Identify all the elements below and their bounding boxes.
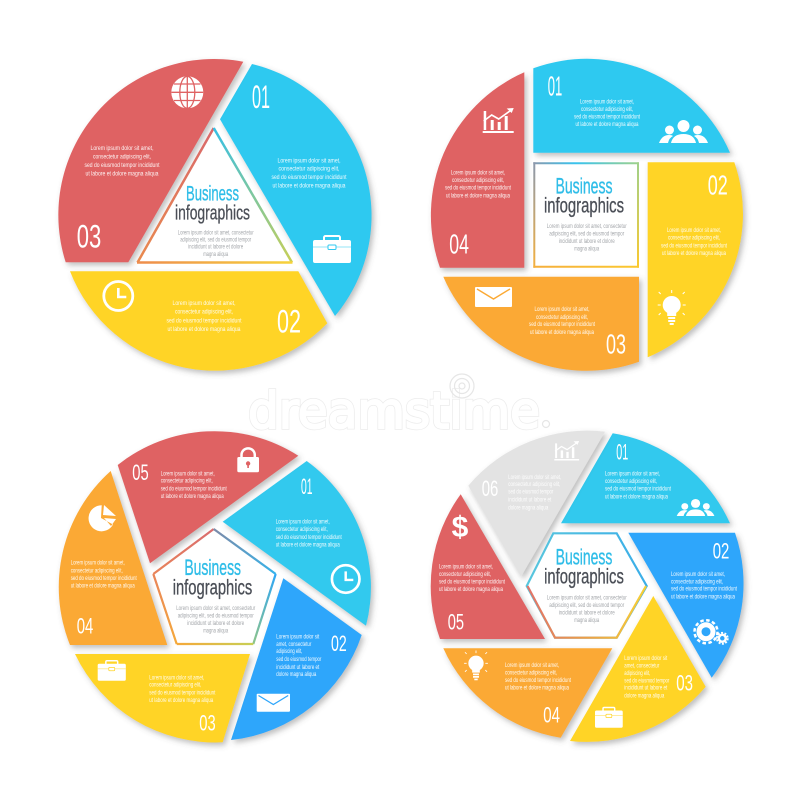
segment 03 yellow: consectetur adipiscing elit, — [149, 682, 201, 689]
center hexagon: Lorem ipsum dolor sit amet, consectetur — [547, 595, 627, 602]
chart: three-segment circle — [58, 59, 372, 371]
segment 02 yellow: 02 — [708, 169, 728, 200]
segment 02 yellow: 02 — [277, 304, 301, 340]
segment 02 yellow: Lorem ipsum dolor sit amet, — [667, 227, 721, 234]
segment 05 red: consectetur adipiscing elit, — [161, 478, 213, 485]
segment 01 blue: Lorem ipsum dolor sit amet, — [605, 471, 660, 478]
segment 03 red — [58, 59, 243, 262]
segment 03 yellow: incididunt ut labore et — [624, 685, 667, 692]
segment 01 blue — [223, 461, 371, 626]
segment 05 red: 05 — [132, 460, 149, 485]
segment 03 orange: consectetur adipiscing elit, — [536, 314, 588, 321]
segment 02 dark blue: incididunt ut labore et — [276, 664, 319, 671]
chart: five-segment circle — [59, 431, 371, 742]
segment 03 orange: Lorem ipsum dolor sit amet, — [534, 306, 590, 313]
segment 02 yellow: consectetur adipiscing elit, — [175, 308, 233, 316]
segment 03 red: ut labore et dolore magna aliqua — [86, 170, 159, 177]
segment 04 red: 04 — [449, 228, 469, 259]
segment 01 blue — [220, 64, 372, 316]
segment 03 yellow: 03 — [676, 671, 693, 696]
segment 02 yellow: sed do eiusmod tempor incididunt — [661, 242, 727, 249]
segment 02 yellow: sed do eiusmod tempor incididunt — [166, 317, 242, 324]
segment 02 yellow: ut labore et dolore magna aliqua — [168, 326, 241, 333]
segment 02 dark blue: consectetur adipiscing elit, — [671, 578, 723, 585]
segment 02 yellow: consectetur adipiscing elit, — [668, 235, 720, 242]
icon: gears — [694, 620, 728, 644]
segment 01 blue: sed do eiusmod tempor incididunt — [276, 534, 342, 541]
segment 02 dark blue: sed do eiusmod tempor — [276, 656, 322, 663]
segment 05 red: sed do eiusmod tempor incididunt — [439, 578, 505, 585]
segment 04 orange: 04 — [543, 703, 560, 728]
segment 03 yellow: sed do eiusmod tempor incididunt — [149, 689, 215, 696]
icon: lock — [237, 448, 259, 472]
segment 03 yellow: Lorem ipsum dolor sit amet, — [149, 675, 204, 682]
segment 03 yellow — [570, 596, 706, 742]
center square: incididunt ut labore et dolore — [559, 238, 615, 245]
segment 03 yellow: Lorem ipsum dolor sit — [624, 655, 667, 662]
center hexagon: infographics — [544, 566, 624, 589]
segment 04 orange: ut labore et dolore magna aliqua — [71, 582, 135, 589]
segment 02 dark blue: Lorem ipsum dolor sit — [276, 633, 319, 640]
segment 02 dark blue — [231, 578, 362, 740]
chart: four-segment circle — [431, 59, 743, 371]
center pentagon: infographics — [173, 576, 252, 599]
segment 04 orange: Lorem ipsum dolor sit amet, — [71, 560, 125, 567]
center hexagon: Business — [556, 544, 612, 569]
segment 05 red: sed do eiusmod tempor incididunt — [161, 485, 227, 492]
segment 01 blue: sed do eiusmod tempor incididunt — [605, 486, 671, 493]
center hexagon: adipiscing elit, sed do eiusmod tempor — [549, 602, 624, 609]
segment 03 red: 03 — [77, 219, 101, 255]
watermark: dreamstime — [248, 382, 540, 440]
segment 03 orange — [443, 277, 639, 371]
center triangle: Business — [186, 183, 239, 206]
segment 04 orange: sed do eiusmod tempor incididunt — [71, 575, 137, 582]
segment 06 grey: Lorem ipsum dolor sit amet, — [508, 474, 561, 481]
segment 03 yellow: 03 — [199, 711, 216, 736]
segment 02 dark blue: ut labore et dolore magna aliqua — [671, 593, 735, 600]
segment 01 blue: ut labore et dolore magna aliqua — [272, 182, 346, 190]
segment 03 orange: sed do eiusmod tempor incididunt — [529, 321, 595, 328]
segment 02 yellow: ut labore et dolore magna aliqua — [662, 250, 726, 257]
segment 04 orange: consectetur adipiscing elit, — [71, 567, 123, 574]
chart: six-segment circle — [431, 431, 744, 742]
segment 01 blue: ut labore et dolore magna aliqua — [276, 541, 340, 548]
center triangle: Lorem ipsum dolor sit amet, consectetur — [178, 230, 254, 236]
segment 01 blue: 01 — [548, 71, 562, 102]
segment 04 orange: consectetur adipiscing elit, — [505, 670, 557, 677]
center hexagon: incididunt ut labore et dolore — [559, 609, 615, 616]
segment 02 dark blue — [628, 533, 744, 678]
center pentagon: Lorem ipsum dolor sit amet, consectetur — [176, 605, 255, 612]
segment 03 yellow — [75, 654, 250, 742]
segment 02 yellow — [70, 271, 327, 371]
segment 06 grey: incididunt ut labore et — [508, 497, 551, 504]
center triangle — [137, 127, 293, 263]
segment 01 blue: 01 — [616, 439, 628, 464]
center square: magna aliqua — [574, 246, 600, 252]
segment 01 blue — [533, 59, 730, 153]
center pentagon: Business — [184, 555, 241, 580]
segment 01 blue: Lorem ipsum dolor sit amet, — [278, 157, 341, 164]
segment 04 orange: 04 — [77, 613, 93, 638]
segment 02 yellow — [648, 162, 743, 357]
segment 02 dark blue: amet, consectetur — [276, 641, 312, 648]
segment 01 blue — [561, 433, 730, 523]
segment 04 red — [431, 72, 524, 268]
center triangle: infographics — [175, 202, 250, 224]
center hexagon: magna aliqua — [574, 617, 600, 624]
center hexagon — [527, 533, 647, 638]
segment 04 red: Lorem ipsum dolor sit amet, — [451, 170, 505, 177]
segment 03 yellow: ut labore et dolore magna aliqua — [149, 697, 214, 704]
segment 01 blue: Lorem ipsum dolor sit amet, — [276, 519, 330, 526]
segment 01 blue: sed do eiusmod tempor incididunt — [574, 114, 640, 121]
segment 05 red: Lorem ipsum dolor sit amet, — [439, 564, 493, 571]
center square: Lorem ipsum dolor sit amet, consectetur — [547, 223, 627, 230]
segment 01 blue: ut labore et dolore magna aliqua — [605, 493, 668, 500]
segment 01 blue: consectetur adipiscing elit, — [605, 478, 657, 485]
segment 02 dark blue: Lorem ipsum dolor sit amet, — [671, 571, 725, 578]
segment 03 yellow: dolore magna aliqua — [624, 692, 665, 699]
segment 05 red: ut labore et dolore magna aliqua — [161, 493, 224, 500]
segment 01 blue: consectetur adipiscing elit, — [278, 166, 340, 173]
segment 02 dark blue: 02 — [713, 539, 729, 564]
segment 02 yellow: Lorem ipsum dolor sit amet, — [172, 300, 236, 307]
segment 04 red: ut labore et dolore magna aliqua — [446, 192, 510, 199]
segment 06 grey: consectetur adipiscing elit, — [508, 481, 560, 488]
segment 01 blue: consectetur adipiscing elit, — [581, 106, 633, 113]
center square: adipiscing elit, sed do eiusmod tempor — [549, 230, 624, 237]
segment 02 dark blue: adipiscing elit, — [276, 648, 302, 655]
icon: globe — [171, 76, 203, 108]
segment 01 blue: consectetur adipiscing elit, — [276, 526, 328, 533]
segment 04 red: sed do eiusmod tempor incididunt — [445, 185, 511, 192]
segment 03 orange: 03 — [606, 328, 626, 359]
segment 01 blue: ut labore et dolore magna aliqua — [576, 121, 639, 128]
segment 01 blue: 01 — [301, 474, 312, 499]
segment 03 yellow: adipiscing elit, — [624, 670, 650, 677]
segment 03 red: sed do eiusmod tempor incididunt — [84, 162, 160, 169]
center pentagon — [153, 529, 276, 644]
segment 04 orange — [443, 648, 612, 738]
segment 05 red: Lorem ipsum dolor sit amet, — [161, 470, 215, 477]
segment 03 red: consectetur adipiscing elit, — [93, 153, 151, 160]
segment 05 red — [431, 494, 545, 639]
segment 01 blue: 01 — [252, 79, 270, 115]
segment 05 red: consectetur adipiscing elit, — [439, 571, 491, 578]
segment 04 red: consectetur adipiscing elit, — [452, 177, 504, 184]
center pentagon: incididunt ut labore et dolore — [187, 620, 245, 627]
segment 03 yellow: amet, consectetur — [624, 663, 660, 670]
center square — [533, 162, 639, 268]
segment 04 orange: Lorem ipsum dolor sit amet, — [505, 662, 559, 669]
segment 01 blue: sed do eiusmod tempor incididunt — [272, 174, 347, 181]
segment 05 red — [118, 431, 298, 563]
center pentagon: adipiscing elit, sed do eiusmod tempor — [178, 612, 254, 620]
segment 03 orange: ut labore et dolore magna aliqua — [530, 329, 594, 336]
center square: infographics — [544, 195, 624, 218]
segment 06 grey — [468, 431, 605, 577]
segment 04 orange: sed do eiusmod tempor incididunt — [505, 677, 571, 684]
center triangle: incididunt ut labore et dolore — [188, 244, 244, 251]
segment 02 dark blue: sed do eiusmod tempor incididunt — [671, 586, 737, 593]
icon: dollar: $ — [452, 511, 469, 544]
segment 04 orange — [59, 471, 167, 645]
center triangle: adipiscing elit, sed do eiusmod tempor — [180, 236, 251, 244]
segment 05 red: ut labore et dolore magna aliqua — [439, 586, 503, 593]
segment 02 dark blue: dolore magna aliqua — [276, 671, 317, 678]
segment 06 grey: 06 — [482, 476, 498, 501]
segment 06 grey: dolore magna aliqua — [508, 504, 549, 511]
segment 02 dark blue: 02 — [331, 631, 347, 656]
watermark: dreamstime — [248, 382, 540, 440]
segment 06 grey: sed do eiusmod tempor — [508, 489, 554, 496]
icon: pie — [89, 505, 116, 531]
segment 05 red: 05 — [448, 609, 464, 634]
center triangle: magna aliqua — [203, 251, 229, 258]
center pentagon: magna aliqua — [203, 628, 229, 634]
segment 03 yellow: sed do eiusmod tempor — [624, 677, 670, 684]
segment 04 orange: ut labore et dolore magna aliqua — [505, 684, 569, 691]
segment 03 red: Lorem ipsum dolor sit amet, — [90, 145, 154, 152]
center square: Business — [556, 173, 612, 198]
segment 01 blue: Lorem ipsum dolor sit amet, — [580, 99, 634, 106]
